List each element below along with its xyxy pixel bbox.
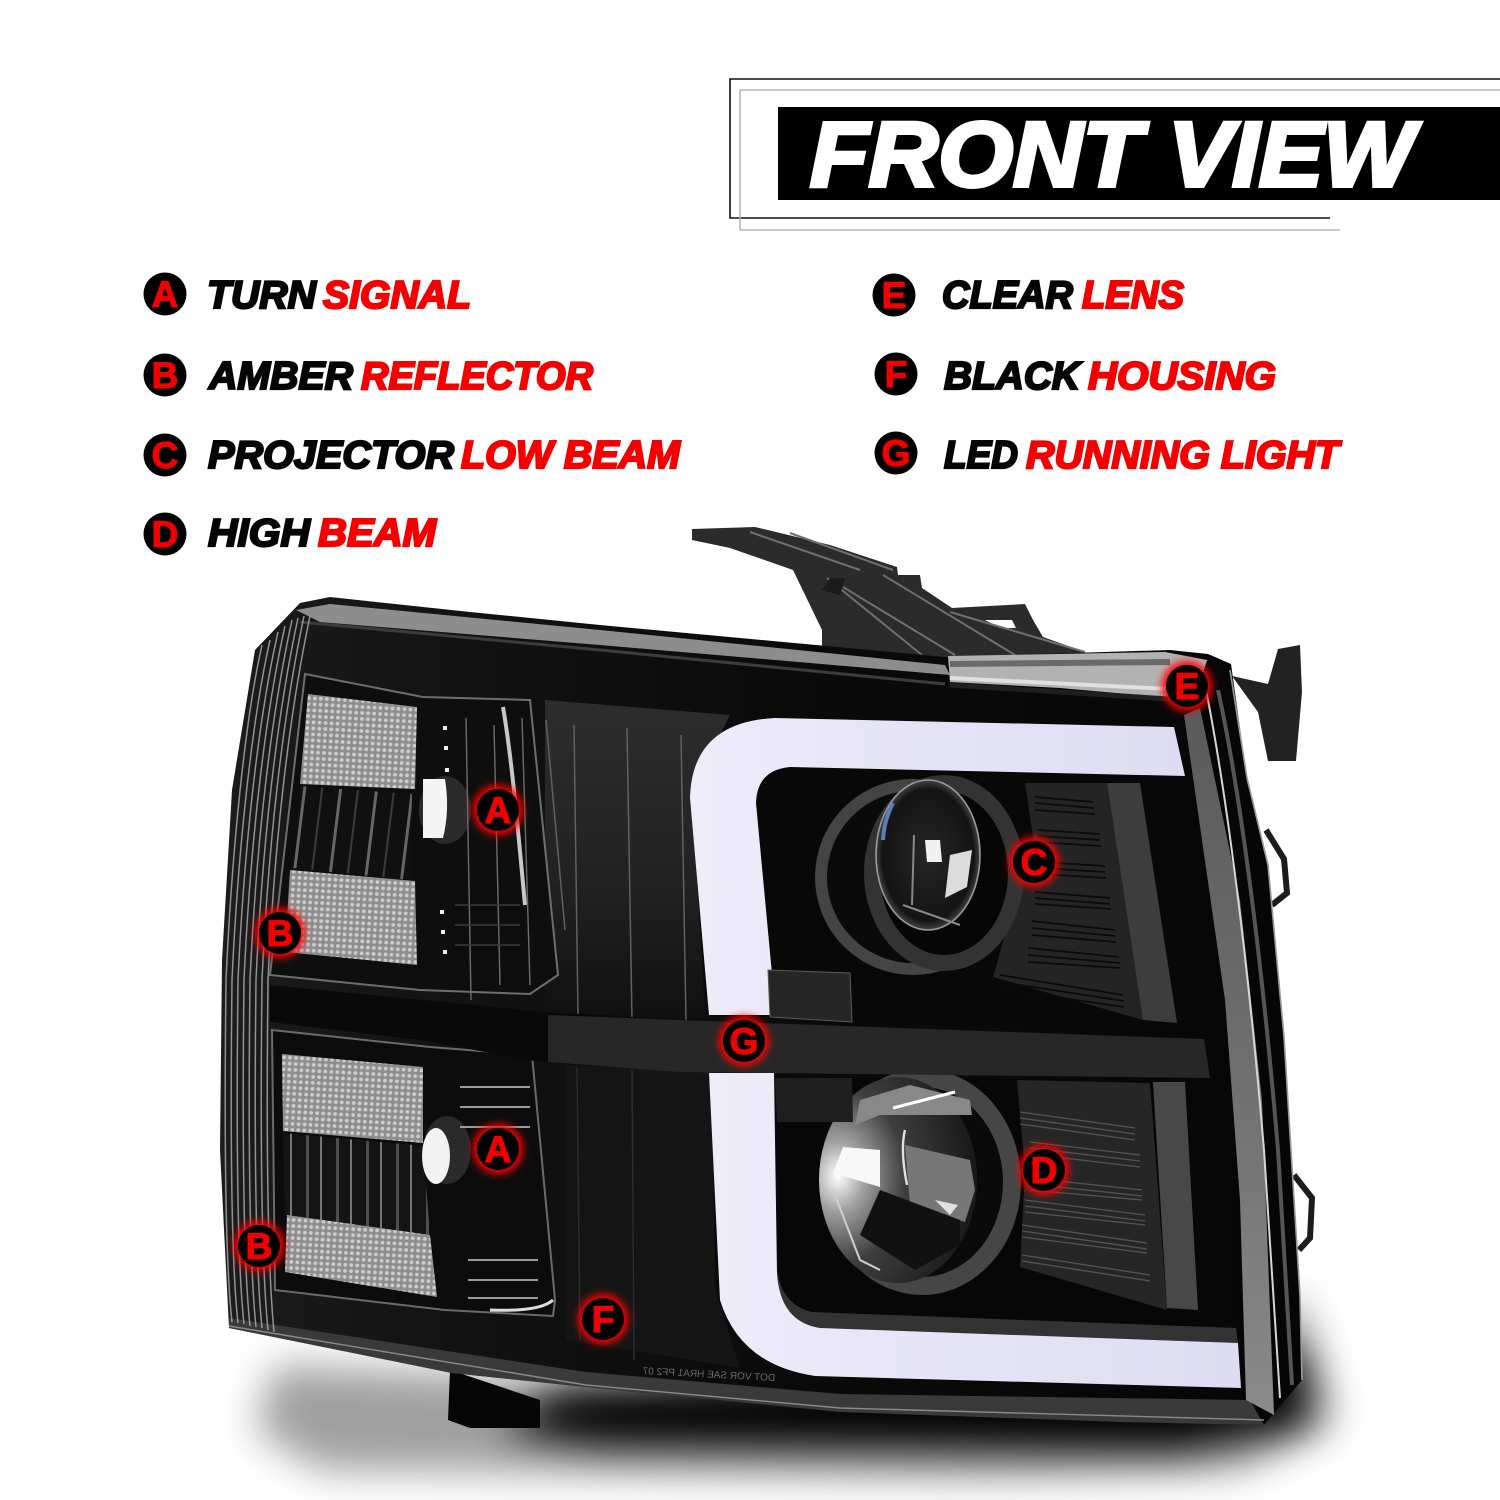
- marker A upper: A: [485, 790, 511, 831]
- ground shadow: [255, 1300, 1335, 1478]
- legend item F: [874, 352, 1276, 398]
- upper reflector: [282, 1054, 423, 1143]
- legend item G: [874, 432, 1342, 477]
- right reflector highlights: [460, 1087, 553, 1310]
- centre dark divider: [270, 985, 690, 1072]
- marker D: [1019, 1145, 1069, 1195]
- legend item A: [144, 272, 471, 317]
- high beam reflector: [819, 1077, 977, 1283]
- legend item F: BLACK: [944, 355, 1083, 398]
- legend item B: AMBER: [208, 355, 353, 398]
- marker E: [1162, 661, 1212, 711]
- legend item D: D: [152, 514, 178, 555]
- marker G: G: [730, 1021, 758, 1062]
- DOT marking: DOT VOR SAE HRA1 PF2 07: [642, 1366, 775, 1384]
- clear lens top edge: [296, 604, 1207, 700]
- marker B lower: [234, 1221, 284, 1271]
- lower reflector: [285, 1215, 437, 1297]
- marker A lower: A: [485, 1129, 511, 1170]
- marker F: [578, 1294, 628, 1344]
- turn signal bulb: [422, 1116, 471, 1184]
- lower frame band: [777, 1270, 1238, 1343]
- legend: right column: [872, 274, 1342, 477]
- marker B upper: B: [267, 913, 293, 954]
- upper LED light guide: [690, 718, 1185, 1015]
- legend item B: B: [152, 355, 178, 396]
- marker E: E: [1175, 666, 1199, 707]
- dark ribs: [293, 786, 412, 880]
- legend item E: [872, 274, 1184, 317]
- frame: [272, 1030, 555, 1316]
- marker D: D: [1031, 1150, 1057, 1191]
- legend item E: E: [882, 275, 906, 316]
- legend item D: HIGH: [208, 512, 311, 555]
- legend item C: C: [152, 435, 178, 476]
- panel lines: [546, 720, 686, 1360]
- legend item B: REFLECTOR: [361, 355, 593, 398]
- legend item E: CLEAR: [942, 274, 1073, 317]
- LED running light bar: [548, 1015, 1210, 1078]
- lower lamp cavity: [776, 1077, 1238, 1343]
- legend: left column: [144, 272, 682, 556]
- upper reflector: [300, 694, 417, 789]
- right bezel: [1184, 670, 1302, 1415]
- legend item A: A: [152, 274, 178, 315]
- side clips: [1266, 830, 1312, 1250]
- title: FRONT VIEW: [810, 104, 1421, 206]
- header: front view: [730, 79, 1500, 230]
- headlight illustration: [220, 527, 1312, 1428]
- marker C: C: [1021, 842, 1047, 883]
- legend item E: LENS: [1082, 274, 1184, 317]
- legend item D: [144, 512, 438, 556]
- left edge ribs: [225, 616, 310, 1332]
- high beam ring: [832, 1078, 1012, 1286]
- housing body: [220, 597, 1302, 1425]
- legend item G: RUNNING LIGHT: [1026, 434, 1342, 477]
- frame: [270, 674, 558, 994]
- projector outer ring: [821, 785, 1005, 969]
- dark ribs: [283, 1133, 430, 1235]
- marker B upper: [255, 908, 305, 958]
- lower reflector: [285, 870, 417, 965]
- upper fins: [993, 783, 1177, 1023]
- turn signal bulb: [419, 776, 471, 844]
- marker A upper: [473, 785, 523, 835]
- lower corner lamp: [272, 1030, 555, 1316]
- lower LED light guide: [709, 1073, 1241, 1388]
- upper connector block: [768, 970, 852, 1022]
- projector lens: [876, 780, 980, 930]
- marker G: [719, 1016, 769, 1066]
- upper centre panel: [545, 700, 730, 1018]
- lower centre panel: [566, 1065, 740, 1368]
- legend item A: TURN: [207, 274, 317, 317]
- bottom rim: [229, 1318, 1264, 1425]
- legend item C: [144, 434, 682, 477]
- lower connector block: [775, 1078, 853, 1122]
- legend item G: LED: [944, 434, 1018, 477]
- legend item C: PROJECTOR: [208, 434, 454, 477]
- legend item F: F: [885, 354, 907, 395]
- lower mounting block: [448, 1370, 540, 1428]
- marker F: F: [592, 1299, 614, 1340]
- legend item C: LOW BEAM: [461, 434, 682, 477]
- marker B lower: B: [246, 1226, 272, 1267]
- marker C: [1009, 837, 1059, 887]
- right reflector highlights: [442, 707, 530, 1000]
- upper corner lamp: [270, 674, 558, 1000]
- legend item G: G: [882, 433, 910, 474]
- legend item B: [144, 354, 593, 398]
- legend item A: SIGNAL: [323, 274, 471, 317]
- projector inner ring: [872, 783, 1016, 963]
- marker A lower: [473, 1124, 523, 1174]
- callout markers: [234, 661, 1212, 1344]
- side tab: [1232, 645, 1302, 761]
- legend item D: BEAM: [318, 512, 438, 555]
- lower fins: [1017, 1080, 1198, 1310]
- legend item F: HOUSING: [1088, 355, 1276, 398]
- mounting bracket: [692, 527, 1085, 662]
- upper lamp cavity: [756, 767, 1206, 1026]
